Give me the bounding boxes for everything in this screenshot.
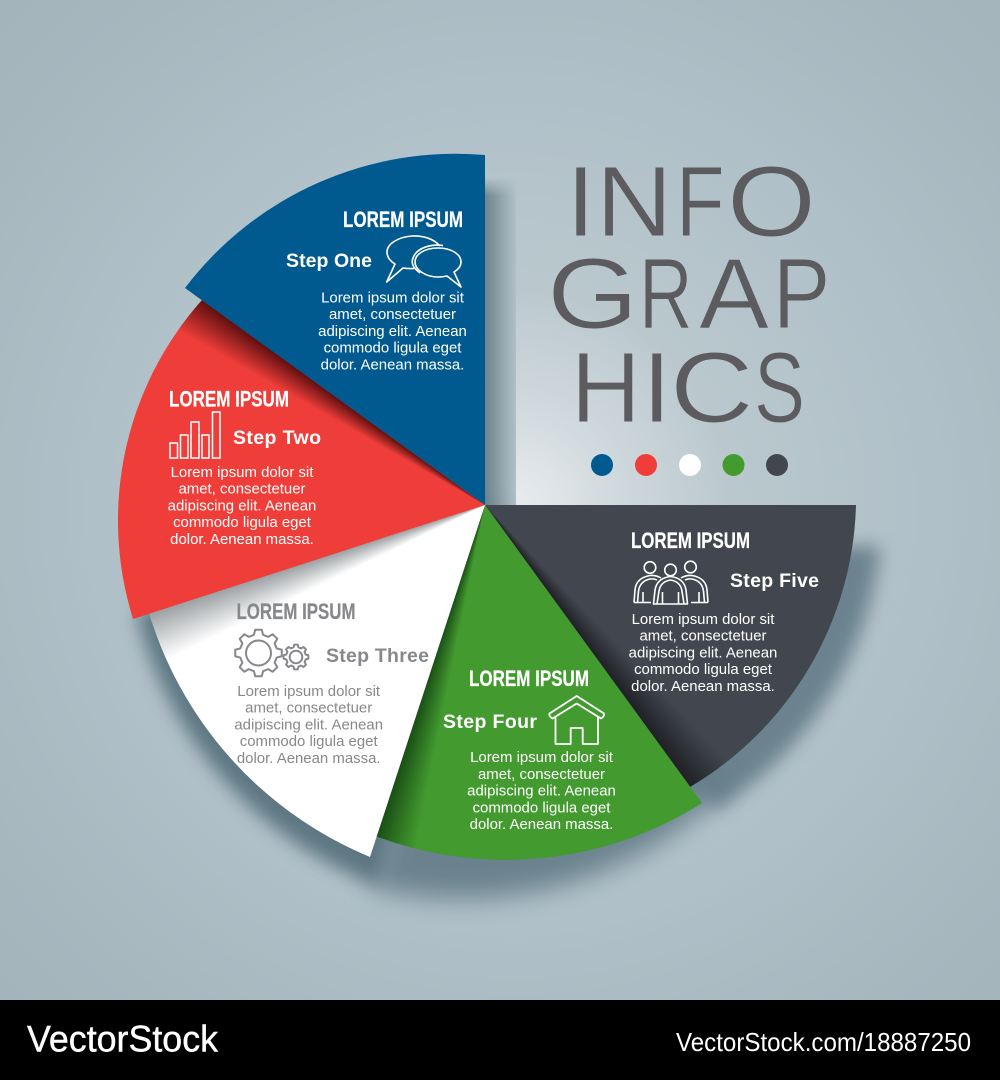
text block: step three: amet, consectetuer bbox=[245, 700, 372, 717]
text block: step three: commodo ligula eget bbox=[240, 733, 378, 750]
text block: step five: Lorem ipsum dolor sit bbox=[632, 611, 775, 628]
text block: step five: adipiscing elit. Aenean bbox=[629, 644, 777, 662]
text block: step two: dolor. Aenean massa. bbox=[170, 531, 314, 548]
title bbox=[547, 146, 830, 444]
text block: step two bbox=[168, 464, 316, 548]
text block: step one: Lorem ipsum dolor sit bbox=[321, 290, 465, 306]
title: A bbox=[699, 238, 769, 350]
text block: step four: amet, consectetuer bbox=[478, 766, 605, 783]
icon: house bbox=[549, 696, 604, 744]
icon: gears bbox=[235, 630, 308, 676]
title: F bbox=[676, 146, 725, 258]
text block: step four: dolor. Aenean massa. bbox=[470, 816, 613, 833]
text block: step one: adipiscing elit. Aenean bbox=[318, 323, 467, 340]
text block: step five bbox=[629, 611, 777, 695]
panel: step four bbox=[376, 505, 702, 860]
footer bar bbox=[0, 1000, 1000, 1080]
label: step five: Step Five bbox=[730, 570, 819, 592]
label: step four: Step Four bbox=[443, 711, 537, 733]
title: R bbox=[639, 238, 693, 350]
icon: speech bubbles bbox=[387, 236, 461, 287]
title: I bbox=[642, 332, 672, 444]
shadow behind blue slice bbox=[485, 178, 516, 505]
title: C bbox=[670, 332, 753, 444]
text block: step five: commodo ligula eget bbox=[634, 661, 773, 678]
panel: step one bbox=[185, 154, 485, 505]
heading: step one: LOREM IPSUM bbox=[343, 207, 463, 232]
label: step two: Step Two bbox=[233, 427, 321, 449]
heading: step three: LOREM IPSUM bbox=[236, 599, 356, 624]
text block: step three: dolor. Aenean massa. bbox=[237, 750, 381, 767]
text block: step five: dolor. Aenean massa. bbox=[631, 678, 775, 695]
title: I bbox=[566, 146, 596, 258]
text block: step one bbox=[318, 290, 467, 374]
text block: step one: commodo ligula eget bbox=[324, 340, 462, 357]
panel: step five bbox=[485, 505, 856, 787]
text block: step two: Lorem ipsum dolor sit bbox=[171, 464, 314, 481]
heading: step two: LOREM IPSUM bbox=[169, 386, 289, 412]
text block: step four: adipiscing elit. Aenean bbox=[467, 782, 616, 800]
footer logo: VectorStock bbox=[27, 1018, 218, 1060]
label: step one: Step One bbox=[286, 250, 372, 272]
shadow behind green slice bbox=[372, 505, 725, 899]
title: S bbox=[754, 332, 805, 444]
heading: step four: LOREM IPSUM bbox=[469, 666, 589, 691]
text block: step two: amet, consectetuer bbox=[178, 481, 306, 498]
panel: step two bbox=[118, 300, 485, 619]
text block: step one: amet, consectetuer bbox=[329, 306, 456, 323]
text block: step two: commodo ligula eget bbox=[173, 514, 312, 531]
text block: step four: Lorem ipsum dolor sit bbox=[470, 749, 614, 766]
text block: step four bbox=[467, 749, 616, 833]
panel: step three bbox=[149, 505, 485, 857]
legend dots bbox=[591, 454, 788, 476]
shadow behind white slice bbox=[136, 505, 485, 886]
title: O bbox=[727, 146, 816, 258]
text block: step three: adipiscing elit. Aenean bbox=[234, 716, 383, 734]
text block: step five: amet, consectetuer bbox=[639, 628, 767, 645]
icon: people bbox=[634, 561, 708, 604]
title: H bbox=[571, 332, 641, 444]
title: N bbox=[596, 146, 672, 258]
text block: step two: adipiscing elit. Aenean bbox=[168, 498, 316, 514]
title: P bbox=[773, 238, 830, 350]
text block: step four: commodo ligula eget bbox=[473, 799, 611, 816]
heading: step five: LOREM IPSUM bbox=[631, 528, 750, 553]
text block: step three: Lorem ipsum dolor sit bbox=[237, 683, 381, 700]
label: step three: Step Three bbox=[326, 645, 429, 667]
icon: bar chart bbox=[170, 412, 220, 458]
shadow behind dark slice bbox=[520, 546, 880, 810]
text block: step one: dolor. Aenean massa. bbox=[321, 356, 464, 374]
text block: step three bbox=[234, 683, 383, 767]
footer url: VectorStock.com/18887250 bbox=[676, 1027, 971, 1057]
title: G bbox=[547, 238, 638, 350]
